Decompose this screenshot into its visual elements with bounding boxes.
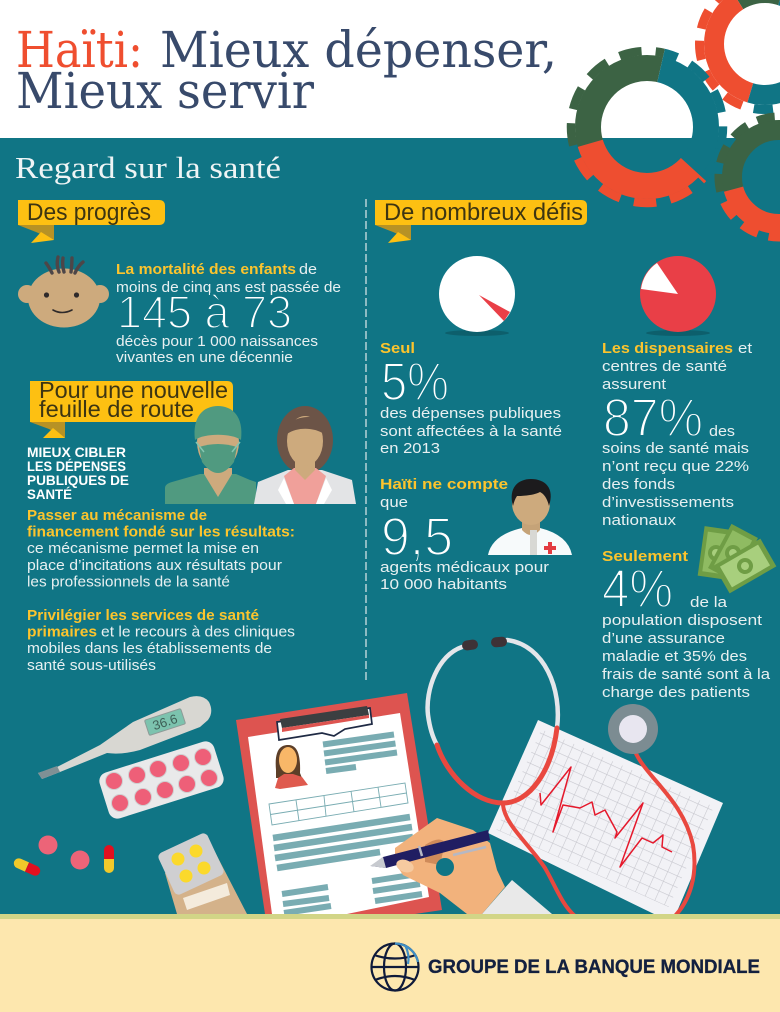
- logo: globe: [372, 943, 418, 990]
- text: 5% public spending: [380, 340, 562, 457]
- text: 4% insurance: de la: [690, 594, 728, 611]
- text: 5% public spending: sont affectées à la santé: [380, 423, 562, 440]
- icon: loose pills and capsules: [12, 836, 114, 877]
- portrait: [275, 745, 308, 789]
- icon: pink pill blister: [97, 739, 226, 821]
- icon: thermometer: 36.6: [151, 711, 179, 733]
- text: 87% clinics: des fonds: [602, 476, 675, 493]
- text: financing mechanism: les professionnels de la santé: [27, 574, 230, 590]
- text: 9,5 health workers: [380, 476, 549, 593]
- text: 87% clinics: et: [738, 340, 753, 357]
- text: child mortality: vivantes en une décennie: [116, 349, 293, 366]
- text: 4% insurance: [602, 548, 771, 701]
- text: 87% clinics: centres de santé: [602, 358, 727, 375]
- ribbon: Pour une nouvelle feuille de route: feuille de route: [39, 396, 194, 422]
- text: 87% clinics: assurent: [602, 376, 667, 393]
- icon: woman doctor: [254, 406, 356, 504]
- text: 5% public spending: Seul: [380, 340, 415, 357]
- text: child mortality: [116, 261, 341, 366]
- text: financing mechanism: ce mécanisme permet la mise en: [27, 540, 259, 557]
- footer band: [0, 914, 780, 1012]
- text: primary services: mobiles dans les établissements de: [27, 640, 272, 657]
- text: 5% public spending: 5%: [381, 352, 449, 412]
- text: primary services: Privilégier les services de santé: [27, 607, 259, 624]
- text: 87% clinics: soins de santé mais: [602, 440, 749, 457]
- text: 4% insurance: d’une assurance: [602, 630, 725, 647]
- text: child mortality: La mortalité des enfants: [116, 261, 296, 278]
- icon: doctor: [488, 479, 572, 555]
- text: 9,5 health workers: 9,5: [381, 507, 453, 567]
- text: child mortality: 145 à 73: [117, 286, 292, 338]
- text: child mortality: de: [299, 261, 317, 278]
- icon: banknotes: [698, 524, 776, 593]
- subtitle: Regard sur la santé: [15, 150, 281, 185]
- text: mieux cibler: MIEUX CIBLER: [27, 444, 126, 460]
- text: 5% public spending: en 2013: [380, 440, 440, 457]
- text: 4% insurance: frais de santé sont à la: [602, 666, 771, 683]
- text: mieux cibler: LES DÉPENSES: [27, 458, 126, 474]
- text: 4% insurance: 4%: [602, 559, 673, 619]
- text: primary services: [27, 607, 295, 674]
- text: 4% insurance: charge des patients: [602, 684, 750, 701]
- gear: centre: [571, 51, 723, 203]
- gear: lower right: [718, 116, 780, 238]
- text: 87% clinics: nationaux: [602, 512, 677, 529]
- form table: [269, 783, 408, 825]
- text: mieux cibler: PUBLIQUES DE: [27, 472, 129, 488]
- ribbon: Pour une nouvelle feuille de route: [30, 377, 233, 438]
- icon: hand with pen: [370, 818, 552, 914]
- text: 4% insurance: maladie et 35% des: [602, 648, 747, 665]
- text: 87% clinics: des: [709, 423, 735, 440]
- pie chart: 87%: [640, 256, 716, 336]
- text: child mortality: moins de cinq ans est passée de: [116, 279, 341, 296]
- text: 5% public spending: des dépenses publiques: [380, 405, 561, 422]
- text: 9,5 health workers: Haïti ne compte: [380, 476, 508, 493]
- text: 4% insurance: Seulement: [602, 548, 688, 565]
- text: mieux cibler: SANTÉ: [27, 486, 72, 502]
- ribbon: Des progrès: Des progrès: [27, 199, 151, 226]
- text: financing mechanism: place d’incitations aux résultats pour: [27, 557, 282, 574]
- ribbon: De nombreux défis: [375, 199, 587, 243]
- text: financing mechanism: financement fondé sur les résultats:: [27, 524, 295, 540]
- icon: surgeon: [165, 406, 256, 504]
- text: 87% clinics: n’ont reçu que 22%: [602, 458, 749, 475]
- icon: ECG paper: [488, 720, 723, 914]
- pie chart: 5%: [439, 256, 515, 336]
- title: Mieux dépenser,: [160, 21, 557, 79]
- text: primary services: primaires: [27, 624, 97, 640]
- form lines: [273, 734, 422, 913]
- ribbon: De nombreux défis: De nombreux défis: [384, 199, 583, 226]
- divider: [365, 199, 367, 682]
- icon: baby face: [18, 257, 109, 328]
- text: 87% clinics: d’investissements: [602, 494, 734, 511]
- text: 9,5 health workers: agents médicaux pour: [380, 559, 549, 576]
- text: 9,5 health workers: 10 000 habitants: [380, 576, 507, 593]
- text: child mortality: décès pour 1 000 naissances: [116, 333, 318, 350]
- icon: yellow pill box: [157, 832, 247, 914]
- text: mieux cibler: [27, 444, 129, 502]
- text: 87% clinics: Les dispensaires: [602, 340, 733, 357]
- text: 4% insurance: population disposent: [602, 612, 763, 629]
- icon: thermometer: [38, 696, 211, 779]
- title: Mieux servir: [16, 62, 314, 120]
- ribbon: Des progrès: [18, 199, 165, 243]
- icon: clipboard: [236, 693, 442, 914]
- gear: top right: [700, 0, 780, 110]
- title: Haïti:: [16, 21, 143, 79]
- text: primary services: et le recours à des cliniques: [101, 624, 295, 640]
- text: financing mechanism: [27, 507, 295, 590]
- text: financing mechanism: Passer au mécanisme de: [27, 507, 207, 524]
- title: [16, 21, 557, 120]
- text: primary services: santé sous-utilisés: [27, 657, 156, 674]
- logo: wordmark: GROUPE DE LA BANQUE MONDIALE: [428, 957, 760, 978]
- text: 87% clinics: 87%: [603, 388, 703, 448]
- text: 87% clinics: [602, 340, 753, 529]
- ribbon: Pour une nouvelle feuille de route: Pour une nouvelle: [39, 377, 228, 403]
- text: 9,5 health workers: que: [380, 494, 408, 511]
- icon: stethoscope: [428, 636, 694, 916]
